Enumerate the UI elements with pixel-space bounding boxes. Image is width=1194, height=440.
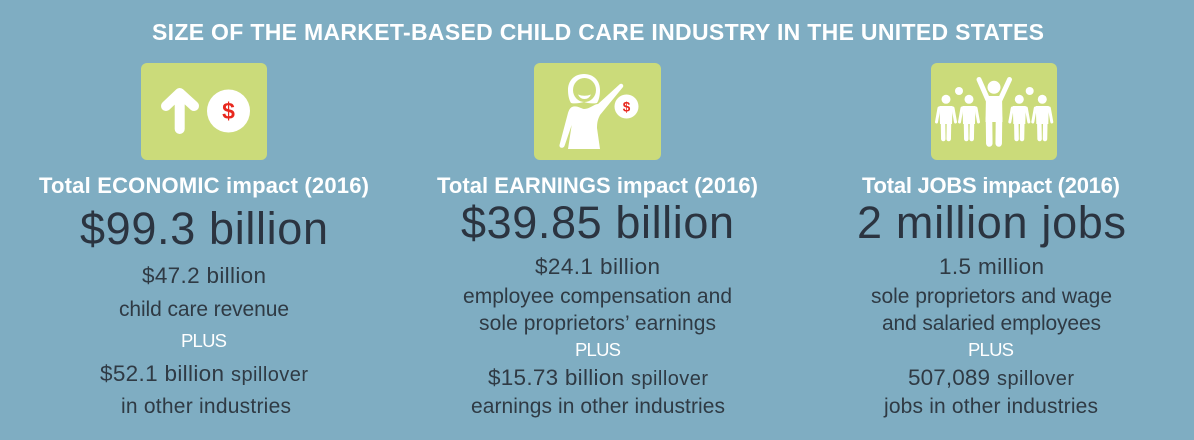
heading: earnings: Total EARNINGS impact (2016) (437, 173, 758, 198)
breakdown: earnings: spillover (631, 368, 708, 390)
heading: economic: Total ECONOMIC impact (2016) (39, 173, 369, 198)
panel: economic impact (39, 63, 369, 418)
breakdown: jobs: 507,089 (908, 365, 990, 390)
big number: economic: $99.3 billion (80, 203, 328, 254)
big number: earnings: $39.85 billion (461, 197, 734, 248)
breakdown: jobs: 1.5 million (939, 254, 1044, 279)
breakdown: jobs: and salaried employees (882, 312, 1101, 335)
icon: arrow and dollar coin (141, 63, 267, 160)
breakdown: earnings: employee compensation and (463, 285, 732, 308)
breakdown: economic (100, 263, 308, 418)
breakdown: economic: $52.1 billion (100, 361, 224, 386)
breakdown: economic: PLUS (181, 330, 227, 351)
icon: woman pointing to dollar coin (534, 63, 661, 160)
icon: arrow and dollar coin: $ (222, 98, 235, 124)
breakdown: earnings: $24.1 billion (535, 254, 660, 279)
panel: jobs impact (857, 63, 1126, 418)
big number: jobs: 2 million jobs (857, 197, 1126, 248)
breakdown: earnings: sole proprietors’ earnings (479, 312, 716, 335)
breakdown: jobs (871, 254, 1112, 418)
breakdown: jobs: spillover (997, 368, 1074, 390)
breakdown: jobs: PLUS (968, 339, 1014, 360)
breakdown: economic: $47.2 billion (142, 263, 266, 288)
icon: group of people with raised arms (931, 63, 1057, 160)
breakdown: earnings: $15.73 billion (488, 365, 624, 390)
title: SIZE OF THE MARKET-BASED CHILD CARE INDUSTRY IN THE UNITED STATES (152, 19, 1044, 45)
breakdown: economic: child care revenue (119, 298, 289, 321)
breakdown: jobs: jobs in other industries (883, 395, 1098, 418)
breakdown: earnings: earnings in other industries (471, 395, 725, 418)
breakdown: earnings: PLUS (575, 339, 621, 360)
breakdown: economic: spillover (231, 364, 308, 386)
breakdown: economic: in other industries (121, 395, 291, 418)
breakdown: jobs: sole proprietors and wage (871, 285, 1112, 308)
breakdown: earnings (463, 254, 732, 418)
icon: woman pointing to dollar coin: $ (623, 100, 631, 114)
heading: jobs: Total JOBS impact (2016) (862, 173, 1120, 198)
panel: earnings impact (437, 63, 758, 418)
